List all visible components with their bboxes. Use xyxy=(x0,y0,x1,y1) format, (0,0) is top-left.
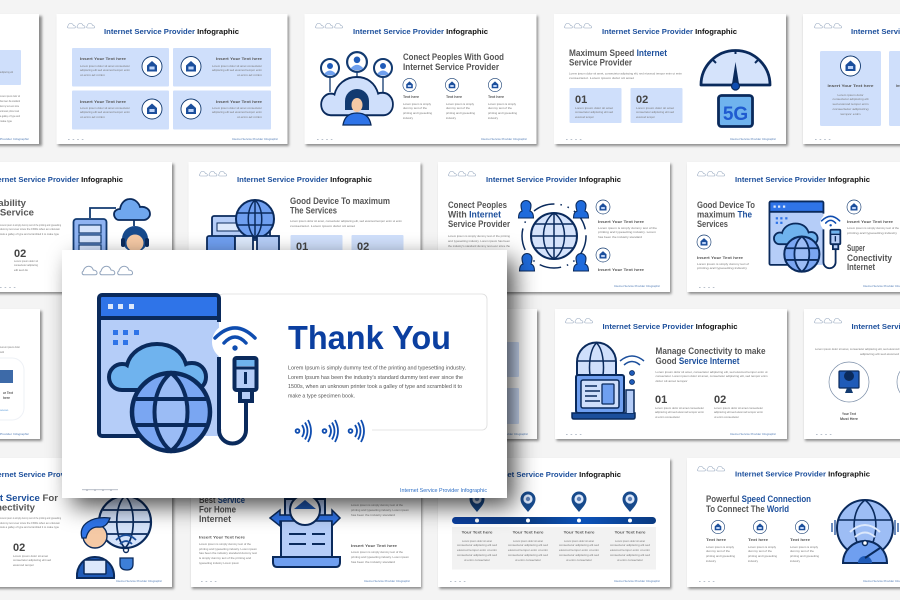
slide title: Internet Service Provider Infographic xyxy=(735,175,870,184)
illustration: browser window, cloud, globe and network cable xyxy=(97,295,258,451)
panel: bottom left: ut enim ad minim xyxy=(80,115,106,119)
text items right: Lorem ipsum is simply dummy text of the xyxy=(351,503,403,507)
text items with icons: Insert Your Text here xyxy=(598,268,644,272)
item 01: ut enim consectetur xyxy=(655,415,680,419)
text item right: Lorem ipsum is simply dummy text of the xyxy=(847,226,899,230)
three text items: printing and typesetting xyxy=(488,111,517,115)
slide fragment: person with laptop and globe xyxy=(0,458,174,589)
item 02: consectetur adipiscing xyxy=(14,263,38,267)
item 02: eiusmod tempor xyxy=(13,563,34,567)
slide: best service for home internet: For Home xyxy=(199,504,236,516)
slide: super conectivity internet xyxy=(687,162,900,294)
slide: good device to maximum the services xyxy=(188,162,422,294)
slide title: Internet Service Provider Infographic xyxy=(486,175,621,184)
item 02: Lorem ipsum dolor sit amet xyxy=(13,554,48,558)
timeline text panel: ut enim consectetur xyxy=(617,558,643,562)
heading: Good Device To xyxy=(697,200,755,211)
heading right: Super xyxy=(847,243,865,254)
text item right xyxy=(847,200,899,235)
timeline pins xyxy=(470,492,638,512)
heading right: Internet xyxy=(847,262,876,273)
slide fragment: row 1 left: Provider Infographic xyxy=(0,137,30,141)
panel: top right: Lorem ipsum dolor sit amet consectetur xyxy=(212,64,262,68)
timeline text panel: Your Text here xyxy=(512,530,544,534)
item 02: Lorem ipsum dolor sit amet consectetur xyxy=(714,406,763,410)
timeline text panel: consectetur adipiscing elit sed xyxy=(457,553,497,557)
panel: top left: Lorem ipsum dolor sit amet consectetur xyxy=(80,64,130,68)
timeline text panel: Lorem ipsum dolor sit amet xyxy=(513,539,543,543)
three text items: dummy text of the xyxy=(748,549,772,553)
slide fragment: row 1 left: has been the standard xyxy=(0,99,20,103)
timeline text panel xyxy=(452,527,656,570)
slide: conect peoples with globe: the industry's standard dummy text ever since the xyxy=(448,244,510,248)
box 02: 02 xyxy=(357,241,369,253)
text item left xyxy=(199,536,258,565)
text items right: has been the industry standard xyxy=(351,560,395,564)
slide fragment: server and cloud: Lorem ipsum is simply dummy text of the printing and typesetting xyxy=(0,223,61,227)
heading right: Conectivity xyxy=(847,253,893,264)
panel: top left: adipiscing elit sed eiusmod tempor enim xyxy=(80,68,131,72)
slide fragment: row 3 left: here xyxy=(3,396,10,400)
timeline text panel: ut enim consectetur xyxy=(566,558,592,562)
slide title: Internet Service Provider Infographic xyxy=(602,322,738,331)
slide fragment: row 3 left: Provider Infographic xyxy=(0,432,30,436)
text item left: Lorem ipsum is simply dummy text of the xyxy=(199,542,251,546)
slide fragment: row 3 left: ooooo xyxy=(0,408,9,412)
text items with icons xyxy=(596,200,657,272)
timeline text panel: Your Text here xyxy=(564,530,594,534)
item 01: 01 xyxy=(655,394,667,406)
slide: conect peoples with globe: With Internet xyxy=(448,210,502,220)
three text items: Text here xyxy=(790,538,810,542)
item 02: 02 xyxy=(13,542,25,554)
footer: Internet Service Provider Infographic xyxy=(116,579,163,583)
slide: powerful speed connection: To Connect The World xyxy=(706,504,789,515)
footer: Internet Service Provider Infographic xyxy=(232,137,279,141)
icon circle with monitor: Your Text xyxy=(842,412,857,416)
slide: manage conectivity: Good Service Internet xyxy=(656,356,740,367)
footer text: Internet Service Provider Infographic xyxy=(400,488,487,494)
three text items: Text here xyxy=(748,538,768,542)
illustration: globe ringed by people xyxy=(518,200,588,271)
slide fragment: server and cloud xyxy=(0,162,174,294)
box 01: eiusmod tempor xyxy=(575,115,594,119)
three text items: printing and typesetting xyxy=(790,554,819,558)
slide: manage conectivity: dolor sit amet tempor xyxy=(656,379,688,383)
text item left: has been the industry standard dummy text xyxy=(199,551,257,555)
item 01: Lorem ipsum dolor sit amet consectetur xyxy=(655,406,704,410)
panel: top left: Insert Your Text here xyxy=(80,57,126,61)
slide fragment: row 1 left: dummy text ever since xyxy=(0,104,19,108)
text items right: Lorem ipsum is simply dummy text of the xyxy=(351,550,403,554)
heading: Conect Peoples xyxy=(448,200,507,211)
icon circle with monitor xyxy=(829,362,869,421)
heading: Maximum Speed Internet xyxy=(569,48,668,59)
slide fragment: server and cloud: took a galley of type and scrambled it to make type xyxy=(0,232,59,236)
panel: bottom right: ut enim ad minim xyxy=(237,115,263,119)
timeline text panel: consectetur adipiscing elit sed xyxy=(457,543,497,547)
box 01 xyxy=(570,88,622,123)
timeline text panel: Your Text here xyxy=(462,530,492,534)
slide fragment: behind thank you panel xyxy=(305,309,539,441)
text item left: printing and typesetting industry xyxy=(697,266,748,270)
box 02: 02 xyxy=(636,94,648,106)
text items right: printing and typesetting industry. Lorem ipsum xyxy=(351,508,410,512)
slide: four text panels with icons xyxy=(56,14,289,146)
heading: Manage Conectivity to make xyxy=(656,346,766,357)
item 02: elit sed do xyxy=(14,268,28,272)
heading: Powerful Speed Connection xyxy=(706,494,811,505)
timeline text panel: consectetur adipiscing elit sed xyxy=(610,543,650,547)
slide: four-step timeline xyxy=(438,458,672,589)
slide title: Internet Service Provider Infographic xyxy=(486,470,621,479)
three text items: printing and typesetting xyxy=(748,554,777,558)
item 02 xyxy=(714,394,764,419)
illustration: globe and device screens xyxy=(207,200,279,258)
three text items: printing and typesetting xyxy=(706,554,735,558)
illustration: laptop with bank and arrows xyxy=(270,495,340,567)
slide fragment: row 1 left: unknown printer took xyxy=(0,109,19,113)
three text items: dummy text of the xyxy=(706,549,730,553)
three text items: industry xyxy=(403,116,414,120)
three text items: printing and typesetting xyxy=(403,111,432,115)
slide: vertical panels, row 1 right xyxy=(803,14,900,146)
icon: 5G speed gauge xyxy=(701,50,770,126)
item 02: adipiscing elit sed eiusmod tempor enim xyxy=(714,410,764,414)
panel: bottom left: Lorem ipsum dolor sit amet consectetur xyxy=(80,106,130,110)
three text items: dummy text of the xyxy=(446,106,470,110)
slide: maximum speed with 5G gauge: consectetur. Lorem ipsum dolor sit amet xyxy=(569,76,634,80)
slide: conect peoples with globe xyxy=(438,162,672,294)
three text items: Lorem ipsum is simply xyxy=(446,102,475,106)
illustration: person, laptop, globe, wifi, mug xyxy=(77,496,151,578)
box 02 xyxy=(630,88,682,123)
slide: connect peoples with cloud illustration xyxy=(304,14,538,146)
slide: super conectivity internet: maximum The xyxy=(697,210,752,220)
item 01: adipiscing elit sed eiusmod tempor enim xyxy=(655,410,705,414)
text items with icons: printing and typesetting industry. Lorem xyxy=(598,230,657,234)
text item left: typesetting industry Lorem ipsum xyxy=(199,561,240,565)
three text items: industry xyxy=(748,559,759,563)
timeline text panel: consectetur adipiscing elit sed xyxy=(508,543,548,547)
footer: Internet Service Provider Infographic xyxy=(364,579,411,583)
text item left: printing and typesetting industry. Lorem ipsum xyxy=(199,547,258,551)
slide: manage conectivity xyxy=(555,309,788,441)
three text items: dummy text of the xyxy=(488,106,512,110)
item 02 xyxy=(14,248,38,272)
slide: connect peoples with cloud illustration: Internet Service Provider xyxy=(403,62,499,73)
text items right: printing and typesetting industry. Lorem ipsum xyxy=(351,555,410,559)
three text items: dummy text of the xyxy=(403,106,427,110)
illustration: people around cloud xyxy=(321,52,393,125)
three text items: Text here xyxy=(488,95,504,99)
heading: Best Service xyxy=(199,495,245,506)
three text items xyxy=(706,520,819,563)
panel with icon: Lorem ipsum dolor xyxy=(838,93,864,97)
box 02 xyxy=(352,235,404,270)
three text items: Lorem ipsum is simply xyxy=(706,545,735,549)
slide: good device to maximum the services: Lorem ipsum dolor sit amet, consectetur adipiscing elit, sed eiusmod tempor enim ut enim xyxy=(290,219,403,223)
slide: maximum speed with 5G gauge: Service Provider xyxy=(569,58,632,68)
three text items: Text here xyxy=(446,95,462,99)
text item left: Insert Your Text here xyxy=(697,256,743,260)
slide: manage conectivity: consectetur. Lorem ipsum dolor sit amet, consectetur adipiscing elit, sed tempor enim xyxy=(656,374,768,378)
item 02: 02 xyxy=(14,248,26,260)
panel: bottom right xyxy=(173,90,271,130)
slide fragment: row 1 left: adipiscing elit xyxy=(0,70,13,74)
box 01: 01 xyxy=(296,241,308,253)
three text items: Lorem ipsum is simply xyxy=(748,545,777,549)
slide fragment: person with laptop and globe: dummy text ever since the 1500s when an unknown xyxy=(0,521,60,525)
panel: bottom right: Lorem ipsum dolor sit amet consectetur xyxy=(212,106,262,110)
rounded text frame xyxy=(218,294,487,430)
box 02: consectetur adipiscing elit sed xyxy=(636,110,674,114)
slide: good device to maximum the services: The Services xyxy=(290,206,337,216)
panel: top left xyxy=(72,48,169,86)
panel with icon: Insert Your Text here xyxy=(828,84,874,88)
text items right xyxy=(351,503,410,564)
timeline text panel: eiusmod tempor enim ut enim xyxy=(559,548,600,552)
item 01 xyxy=(655,394,705,419)
thank you panel shadow xyxy=(72,260,514,506)
panel: top right: Insert Your Text here xyxy=(216,57,262,61)
icon: 5G speed gauge: 5G xyxy=(723,104,748,125)
slide: maximum speed with 5G gauge xyxy=(554,14,788,146)
panel: top right: ut enim ad minim xyxy=(237,73,263,77)
slide: super conectivity internet: Services xyxy=(697,219,728,230)
item 02: consectetur adipiscing elit sed xyxy=(13,558,51,562)
slide fragment: row 3 left: sit xyxy=(0,350,4,354)
text items with icons: Insert Your Text here xyxy=(598,220,644,224)
timeline text panel: eiusmod tempor enim ut enim xyxy=(457,548,498,552)
timeline text panel: ut enim consectetur xyxy=(464,558,490,562)
heading: Conect Peoples With Good xyxy=(403,52,504,63)
heading: thank you: Thank You xyxy=(288,319,451,356)
timeline text panel: consectetur adipiscing elit sed xyxy=(559,553,599,557)
timeline text panel: consectetur adipiscing elit sed xyxy=(610,553,650,557)
text item left: is simply dummy text of the printing and xyxy=(199,556,251,560)
slide: good device to maximum the services: consectetur. Lorem ipsum dolor sit amet xyxy=(290,224,355,228)
footer: Internet Service Provider Infographic xyxy=(614,579,661,583)
three text items: printing and typesetting xyxy=(446,111,475,115)
slide fragment: row 1 left xyxy=(0,14,42,146)
item 02 xyxy=(13,542,51,567)
text item right: printing and typesetting industry xyxy=(847,231,898,235)
item 02: 02 xyxy=(714,394,726,406)
three text items: Text here xyxy=(706,538,726,542)
panel: bottom left xyxy=(72,90,169,130)
decorative clouds xyxy=(82,266,133,275)
text item left: Lorem ipsum is simply dummy text of xyxy=(697,262,749,266)
panel: top right: adipiscing elit sed eiusmod tempor enim xyxy=(212,68,263,72)
slide fragment: person with laptop and globe: took a galley of type and scrambled it to make type xyxy=(0,525,59,529)
three text items: industry xyxy=(790,559,801,563)
three text items: dummy text of the xyxy=(790,549,814,553)
three text items: Lorem ipsum is simply xyxy=(790,545,819,549)
text items right: has been the industry standard xyxy=(351,513,395,517)
footer: Internet Service Provider Infographic xyxy=(730,432,777,436)
three text items: industry xyxy=(706,559,717,563)
sound wave icons xyxy=(296,420,364,442)
three text items: Lorem ipsum is simply xyxy=(488,102,517,106)
slide: best service for home internet xyxy=(191,458,422,589)
illustration: globe wifi and speedometer xyxy=(832,500,898,563)
panel with icon: tempor enim xyxy=(840,112,861,116)
footer: Internet Service Provider Infographic xyxy=(730,137,777,141)
slide fragment: row 3 left xyxy=(0,309,42,441)
panel: top right xyxy=(173,48,271,86)
three text items: industry xyxy=(446,116,457,120)
three text items: industry xyxy=(488,116,499,120)
panel: bottom right: Insert Your Text here xyxy=(216,100,262,104)
illustration: server, cloud and person xyxy=(74,199,150,259)
panel: bottom right: adipiscing elit sed eiusmod tempor enim xyxy=(212,110,263,114)
three text items: Lorem ipsum is simply xyxy=(403,102,432,106)
heading right xyxy=(847,243,893,273)
text item right: Insert Your Text here xyxy=(847,220,893,224)
timeline text panel: Lorem ipsum dolor sit amet xyxy=(462,539,492,543)
panel with icon xyxy=(820,51,881,126)
box 02: eiusmod tempor xyxy=(636,115,655,119)
text items right: Insert Your Text here xyxy=(351,544,397,548)
timeline text panel: eiusmod tempor enim ut enim xyxy=(610,548,651,552)
slide fragment: row 1 left: make type xyxy=(0,119,12,123)
panel: bottom left: adipiscing elit sed eiusmod tempor enim xyxy=(80,110,131,114)
slide: maximum speed with 5G gauge: Lorem ipsum dolor sit amet, consectetur adipiscing elit, sed eiusmod tempor enim ut enim xyxy=(569,72,683,76)
three text items xyxy=(403,78,517,120)
body text: Lorem Ipsum has been the industry's standard dummy text ever since the xyxy=(288,375,463,381)
timeline text panel: eiusmod tempor enim ut enim xyxy=(508,548,549,552)
main panel: thank you slide xyxy=(62,250,507,498)
slide fragment: row 1 left: Lorem ipsum dolor sit xyxy=(0,94,20,98)
slide: conect peoples with globe: and typesetting industry. Lorem ipsum has been xyxy=(448,239,510,243)
box 01: Lorem ipsum dolor sit amet xyxy=(575,106,613,110)
body text: 1500s, when an unknown printer took a galley of type and scrambled it to xyxy=(288,384,462,390)
timeline bar xyxy=(452,517,656,524)
timeline text panel: consectetur adipiscing elit sed xyxy=(508,553,548,557)
body text: make a type specimen book. xyxy=(288,394,355,400)
slide fragment: server and cloud: dummy text ever since the 1500s when an unknown xyxy=(0,227,60,231)
timeline text panel: Your Text here xyxy=(614,530,646,534)
box 02: Lorem ipsum dolor sit amet xyxy=(636,106,674,110)
slide title: Internet Service Provider Infographic xyxy=(735,470,870,478)
item 02: ut enim consectetur xyxy=(714,415,739,419)
panel: bottom left: Insert Your Text here xyxy=(80,100,126,104)
body text: Lorem Ipsum is simply dummy text of the printing and typesetting industry. xyxy=(288,366,466,372)
timeline text panel: Lorem ipsum dolor sit amet xyxy=(564,539,594,543)
illustration: browser window, cloud, globe and cable xyxy=(769,201,841,272)
timeline text panel: Lorem ipsum dolor sit amet xyxy=(615,539,645,543)
item 02: Lorem ipsum dolor sit xyxy=(14,259,38,263)
text item left xyxy=(697,235,749,270)
panel with icon: consectetur adipiscing xyxy=(832,107,869,111)
heading: Good Device To maximum xyxy=(290,196,390,207)
slide fragment: row 3 left: ur Text xyxy=(3,391,14,395)
footer: Internet Service Provider Infographic xyxy=(481,137,528,141)
footer: Internet Service Provider Infographic xyxy=(614,284,661,288)
timeline text panel: consectetur adipiscing elit sed xyxy=(559,543,599,547)
slide title: Internet Service Provider Infographic xyxy=(602,27,737,36)
second panel xyxy=(889,51,900,126)
timeline text panel: ut enim consectetur xyxy=(515,558,541,562)
illustration: globe over laptop with wifi xyxy=(572,342,644,419)
box 01 xyxy=(290,235,342,270)
slide: conect peoples with globe: Lorem ipsum is simply dummy text of the printing xyxy=(448,234,510,238)
footer dots xyxy=(82,489,118,491)
slide: best service for home internet: Internet xyxy=(199,514,232,525)
text items with icons: Lorem ipsum is simply dummy text of the xyxy=(598,226,657,230)
slide: your text must here xyxy=(804,309,900,441)
body text xyxy=(288,366,466,400)
panel with icon: sed eiusmod tempor enim xyxy=(832,102,869,106)
slide title: Internet Service Provider Infographic xyxy=(237,175,372,184)
slide: manage conectivity: Lorem ipsum dolor sit amet, consectetur adipiscing elit, sed eiusmod tempor enim ut xyxy=(656,370,768,374)
slide: conect peoples with globe: Service Provider xyxy=(448,219,510,230)
frame gap behind cable and icons xyxy=(222,418,372,444)
slide fragment: behind thank you panel: Internet Service Provider Infographic xyxy=(482,432,529,436)
slide: powerful speed connection xyxy=(687,458,900,589)
box 01: consectetur adipiscing elit sed xyxy=(575,110,613,114)
slide title: Internet Service Provider Infographic xyxy=(353,27,488,36)
text items with icons: has been the industry standard xyxy=(598,235,642,239)
slide fragment: row 3 left: Lorem ipsum dolor xyxy=(0,345,20,349)
text item left: Insert Your Text here xyxy=(199,536,245,540)
three text items: Text here xyxy=(403,95,419,99)
icon circle with monitor: Must Here xyxy=(840,417,858,421)
box 01: 01 xyxy=(575,94,587,106)
second icon circle xyxy=(897,362,900,402)
slide fragment: person with laptop and globe: Lorem ipsum is simply dummy text of the printing and typesetting xyxy=(0,516,61,520)
panel: top left: ut enim ad minim xyxy=(80,73,106,77)
slide fragment: row 1 left: a galley of type and xyxy=(0,114,20,118)
slide title: Internet Service Provider Infographic xyxy=(104,27,239,36)
panel with icon: consectetur adipiscing elit xyxy=(832,97,869,101)
